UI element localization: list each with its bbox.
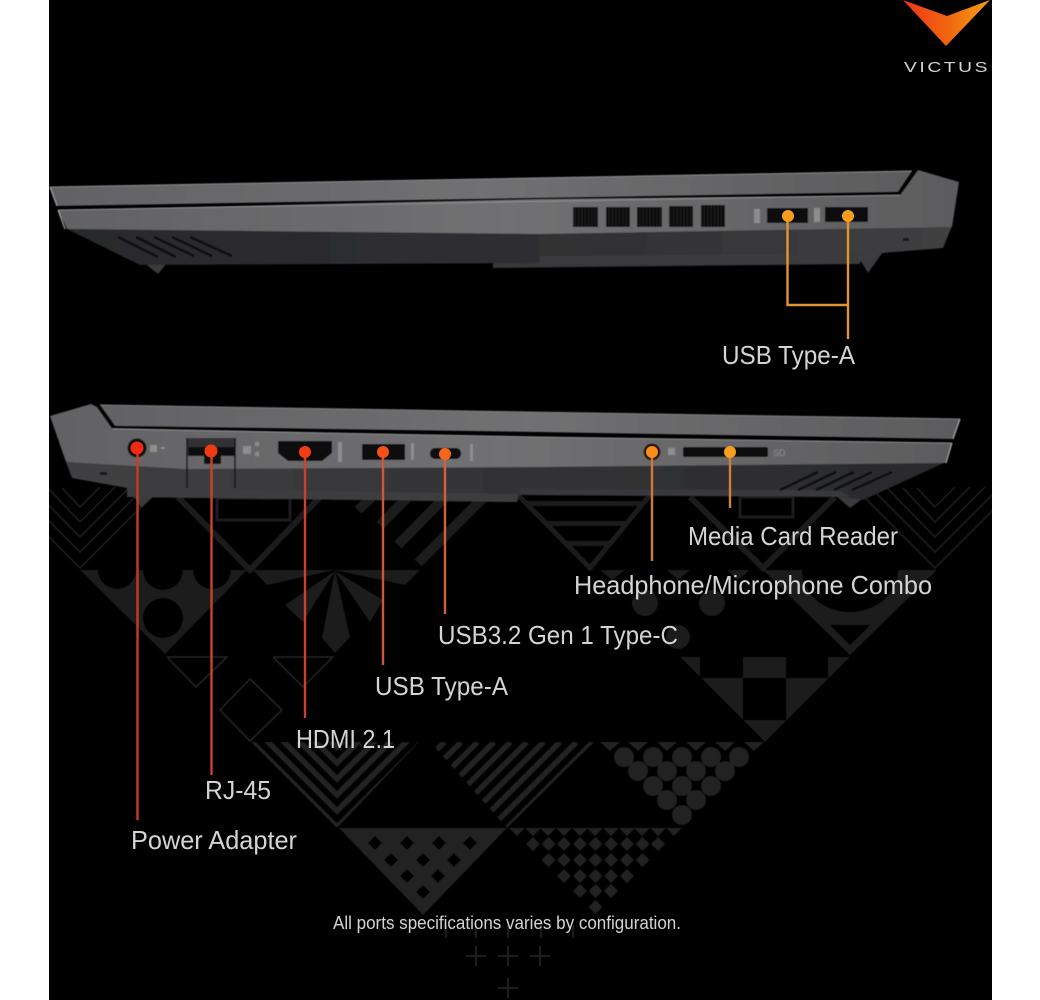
port dot: USB Type-A [377, 446, 389, 458]
decorative triangle pattern [0, 487, 1016, 998]
label: Media Card Reader: Media Card Reader [688, 521, 898, 551]
label: USB Type-A (right side): USB Type-A [722, 340, 856, 370]
footnote: All ports specifications varies by configuration. [333, 913, 681, 933]
logo: Victus [903, 0, 990, 76]
label: Power Adapter: Power Adapter [131, 825, 297, 855]
leader lines: USB Type-A (right side) [788, 216, 848, 339]
logo: Victus: VICTUS [904, 59, 990, 76]
port dot: headphone jack [646, 446, 658, 458]
port dot: media card reader [724, 446, 736, 458]
laptop: left side view: SD [773, 448, 786, 458]
label: RJ-45: RJ-45 [205, 775, 271, 805]
laptop: right side view [50, 170, 959, 274]
port dot: RJ-45 [204, 444, 218, 458]
label: HDMI 2.1: HDMI 2.1 [296, 724, 395, 754]
port dot: USB Type-A 2 [842, 210, 854, 222]
label: Headphone/Microphone Combo: Headphone/Microphone Combo [574, 570, 932, 600]
port dot: USB-C [439, 448, 451, 460]
leader lines: left side ports [138, 449, 730, 820]
laptop: left side view [50, 404, 960, 508]
label: USB Type-A: USB Type-A [375, 671, 509, 701]
port dot: USB Type-A 1 [782, 210, 794, 222]
port dot: power adapter [130, 442, 144, 454]
port dot: HDMI [299, 446, 311, 458]
label: USB3.2 Gen 1 Type-C: USB3.2 Gen 1 Type-C [438, 620, 678, 650]
